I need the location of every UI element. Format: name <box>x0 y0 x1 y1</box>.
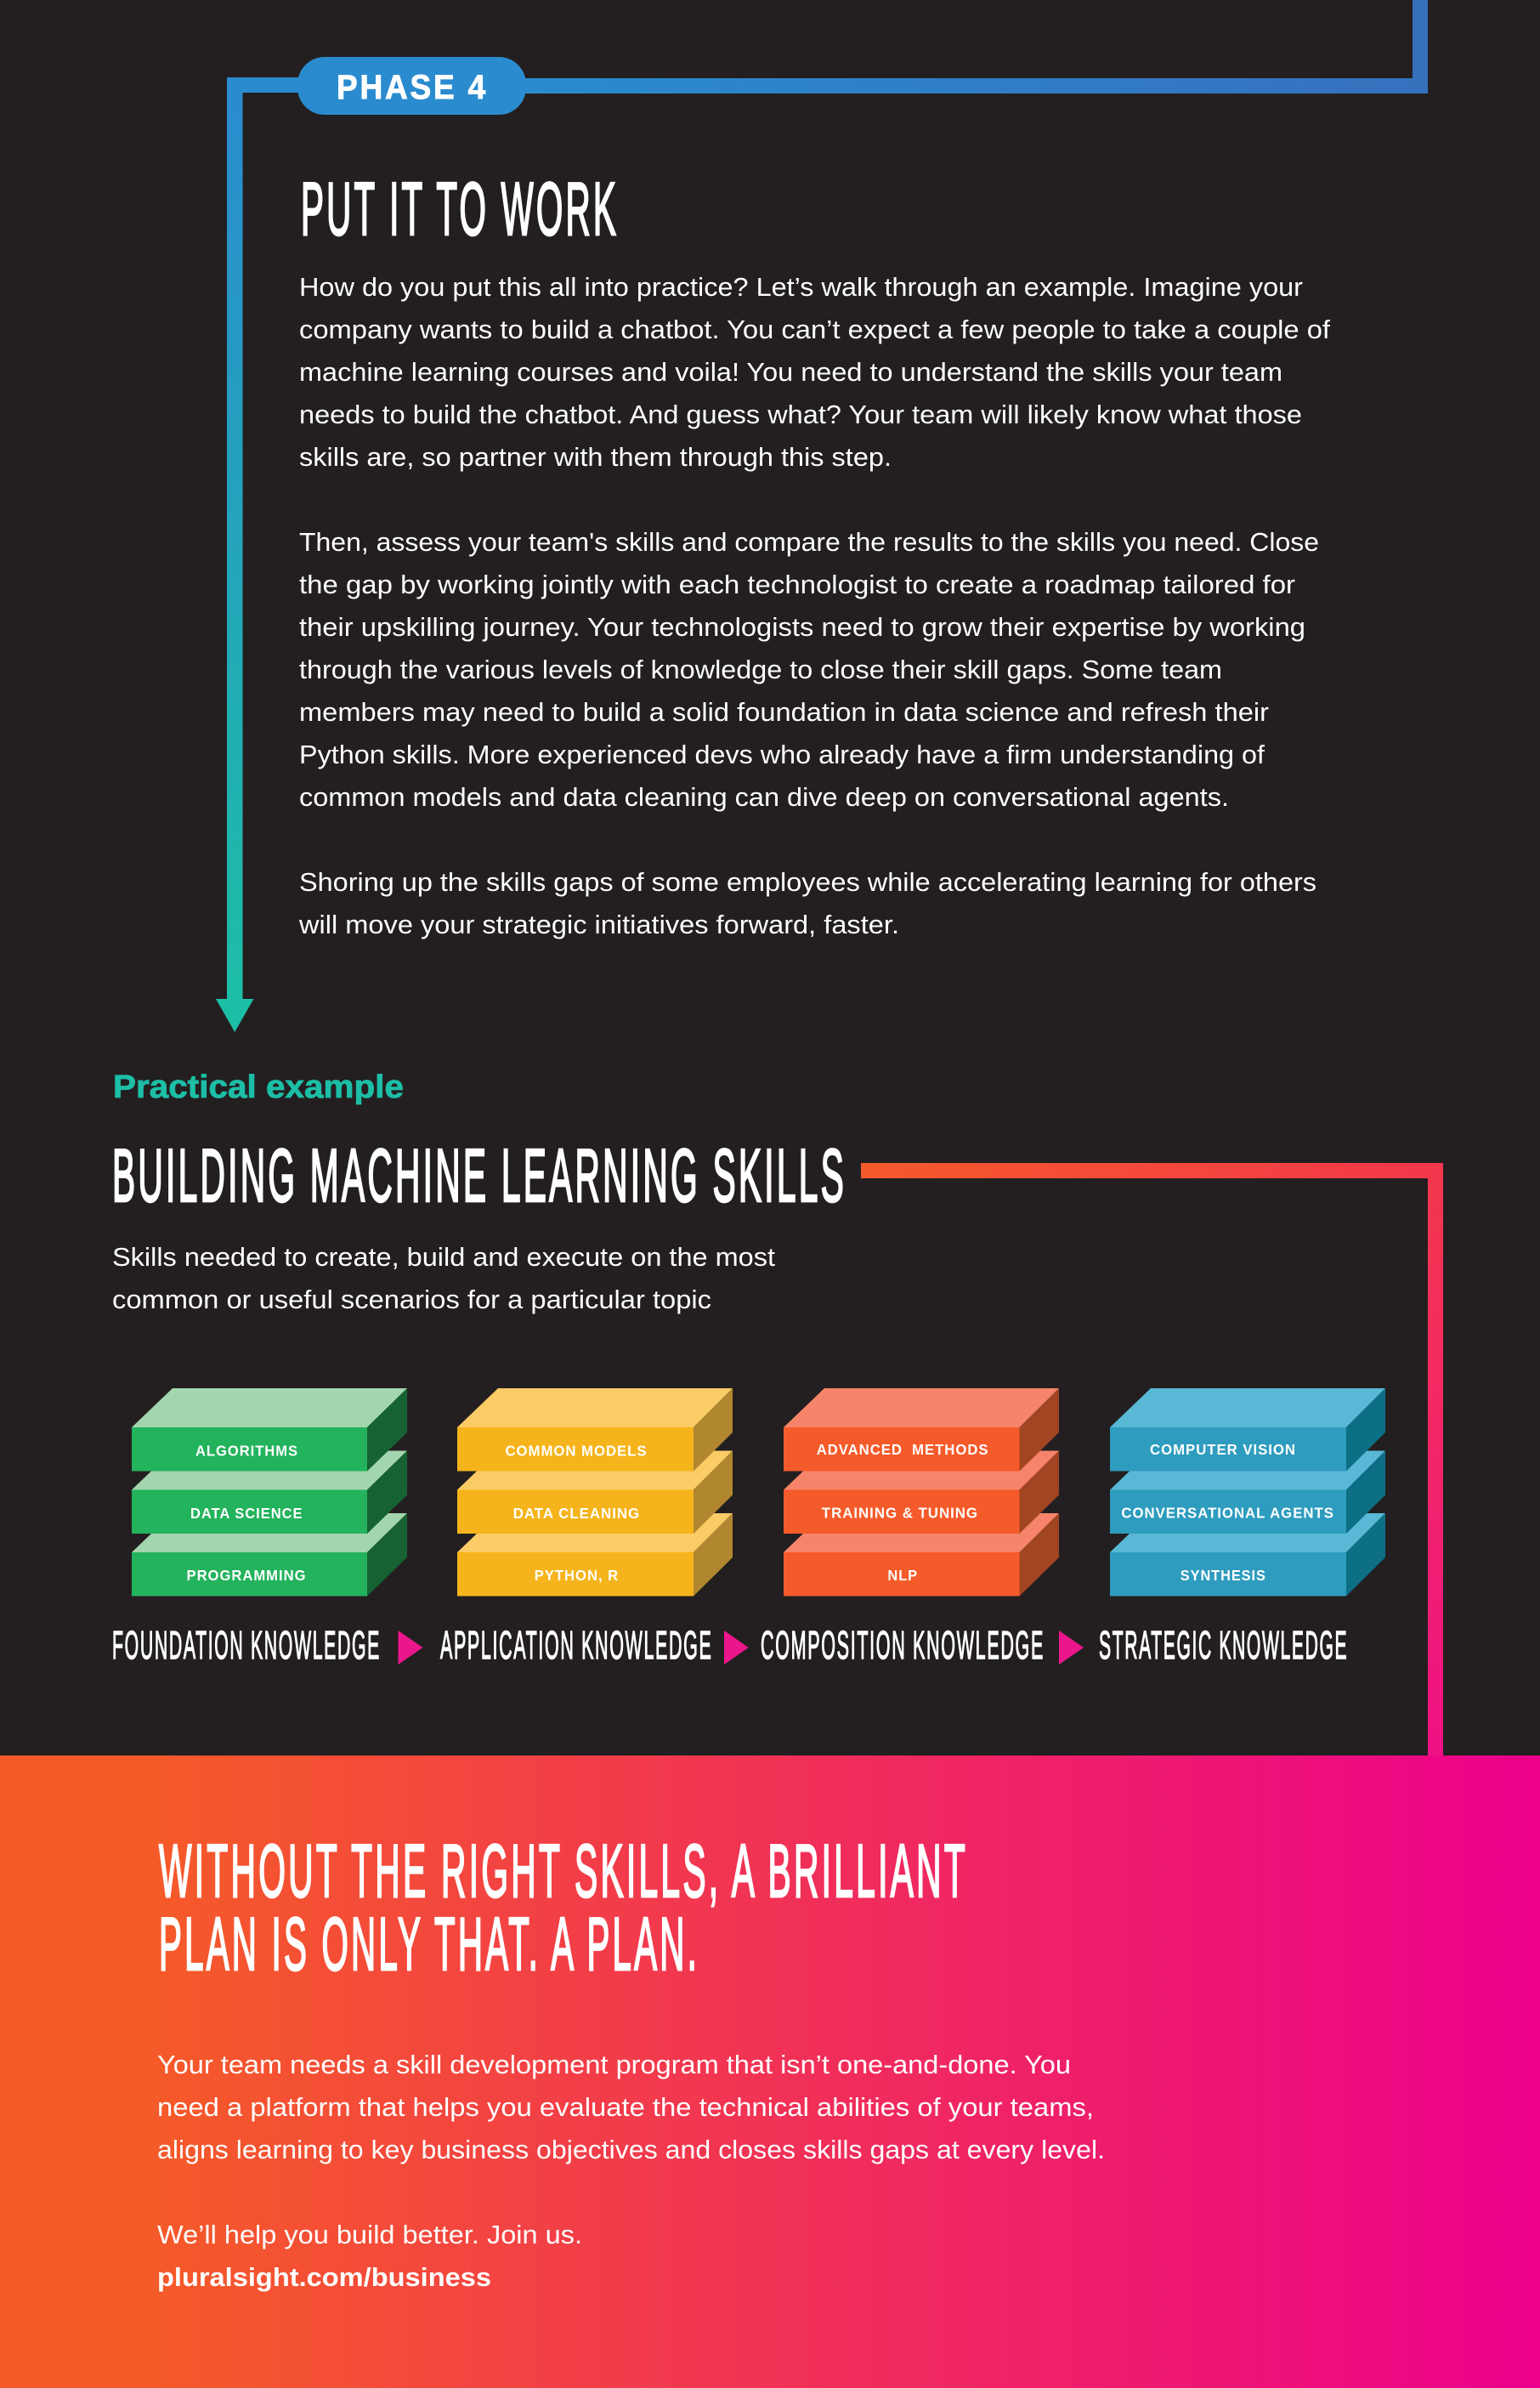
text block: skill development program: Your team needs a skill development program that isn’t one-and-done. You <box>157 2051 1071 2079</box>
link: pluralsight business: pluralsight.com/business <box>157 2263 491 2292</box>
panel: call to action <box>0 1756 1540 2388</box>
arrow: application to composition <box>724 1631 749 1665</box>
badge: phase 4: PHASE 4 <box>337 69 488 106</box>
layer: algorithms: ALGORITHMS <box>195 1443 298 1460</box>
text block: closing paragraph <box>298 868 1316 939</box>
layer: conversational agents: CONVERSATIONAL AGENTS <box>1121 1505 1334 1522</box>
arrow: composition to strategic <box>1059 1631 1084 1665</box>
layer: computer vision: COMPUTER VISION <box>1150 1441 1296 1458</box>
layer: programming <box>132 1513 407 1597</box>
stack: application knowledge <box>457 1388 733 1597</box>
text block: subheading <box>112 1243 776 1314</box>
layer: data cleaning: DATA CLEANING <box>513 1505 640 1522</box>
text block: assessment paragraph: through the various levels of knowledge to close their skill gaps. Some team <box>299 655 1222 684</box>
stack: composition knowledge <box>784 1388 1059 1597</box>
text block: subheading: common or useful scenarios for a particular topic <box>112 1285 711 1314</box>
text block: assessment paragraph: the gap by working jointly with each technologist to create a roadmap tailored for <box>299 570 1295 599</box>
text block: assessment paragraph: members may need to build a solid foundation in data science and refresh their <box>299 698 1269 727</box>
layer: training and tuning: TRAINING & TUNING <box>822 1505 978 1522</box>
text block: intro paragraph: skills are, so partner with them through this step. <box>299 443 892 472</box>
text block: intro paragraph: company wants to build a chatbot. You can’t expect a few people to take a couple of <box>299 315 1331 344</box>
stack: strategic knowledge <box>1110 1388 1385 1597</box>
connector: orange to pink line <box>861 1163 1443 1756</box>
layer: data science: DATA SCIENCE <box>190 1505 303 1522</box>
connector: blue line from previous phase <box>510 0 1428 94</box>
text block: skill development program <box>157 2051 1105 2164</box>
layer: advanced methods <box>784 1388 1059 1471</box>
layer: common models <box>457 1388 733 1471</box>
layer: data cleaning <box>457 1450 733 1534</box>
layer: conversational agents <box>1110 1450 1385 1534</box>
text block: assessment paragraph: Python skills. More experienced devs who already have a firm understanding of <box>299 740 1265 769</box>
text block: skill development program: aligns learning to key business objectives and closes skills gaps at every level. <box>157 2136 1105 2164</box>
heading: without the right skills: PLAN IS ONLY THAT. A PLAN. <box>159 1902 699 1986</box>
text block: assessment paragraph: their upskilling journey. Your technologists need to grow their expertise by working <box>299 613 1305 642</box>
text block: assessment paragraph: common models and data cleaning can dive deep on conversational agents. <box>299 783 1229 812</box>
text: PUT IT TO WORK <box>301 167 619 251</box>
text block: intro paragraph: needs to build the chatbot. And guess what? Your team will likely know what those <box>299 400 1302 429</box>
label: practical example: Practical example <box>113 1069 404 1105</box>
stack: foundation knowledge <box>132 1388 407 1597</box>
text: FOUNDATION KNOWLEDGE <box>112 1623 381 1667</box>
text block: join us: We’ll help you build better. Join us. <box>157 2221 582 2249</box>
layer: common models: COMMON MODELS <box>505 1443 648 1460</box>
badge: phase 4 <box>297 57 526 115</box>
layer: data science <box>132 1450 407 1534</box>
layer: algorithms <box>132 1388 407 1471</box>
text block: intro paragraph <box>299 273 1331 472</box>
layer: computer vision <box>1110 1388 1385 1471</box>
layer: programming: PROGRAMMING <box>187 1567 306 1584</box>
layer: python, r <box>457 1513 733 1597</box>
text block: intro paragraph: How do you put this all into practice? Let’s walk through an example. Imagine your <box>299 273 1303 302</box>
layer: training and tuning <box>784 1450 1059 1534</box>
text block: skill development program: need a platform that helps you evaluate the technical abilities of your teams, <box>157 2093 1094 2122</box>
heading: without the right skills <box>159 1829 968 1986</box>
text: COMPOSITION KNOWLEDGE <box>761 1623 1045 1667</box>
text block: closing paragraph: Shoring up the skills gaps of some employees while accelerating learning for others <box>299 868 1316 897</box>
layer: nlp: NLP <box>887 1567 918 1584</box>
arrow: phase 4 vertical arrow <box>216 77 306 1032</box>
layer: python, r: PYTHON, R <box>535 1567 619 1584</box>
arrow: foundation to application <box>398 1631 423 1665</box>
text block: subheading: Skills needed to create, build and execute on the most <box>112 1243 776 1272</box>
layer: synthesis <box>1110 1513 1385 1597</box>
layer: advanced methods: ADVANCED METHODS <box>817 1441 989 1458</box>
text block: assessment paragraph: Then, assess your team's skills and compare the results to the skills you need. Close <box>299 528 1319 557</box>
layer: nlp <box>784 1513 1059 1597</box>
text block: closing paragraph: will move your strategic initiatives forward, faster. <box>298 910 899 939</box>
text block: intro paragraph: machine learning courses and voila! You need to understand the skills your team <box>299 358 1282 387</box>
text block: assessment paragraph <box>299 528 1319 812</box>
text: APPLICATION KNOWLEDGE <box>440 1623 712 1667</box>
layer: synthesis: SYNTHESIS <box>1180 1567 1266 1584</box>
